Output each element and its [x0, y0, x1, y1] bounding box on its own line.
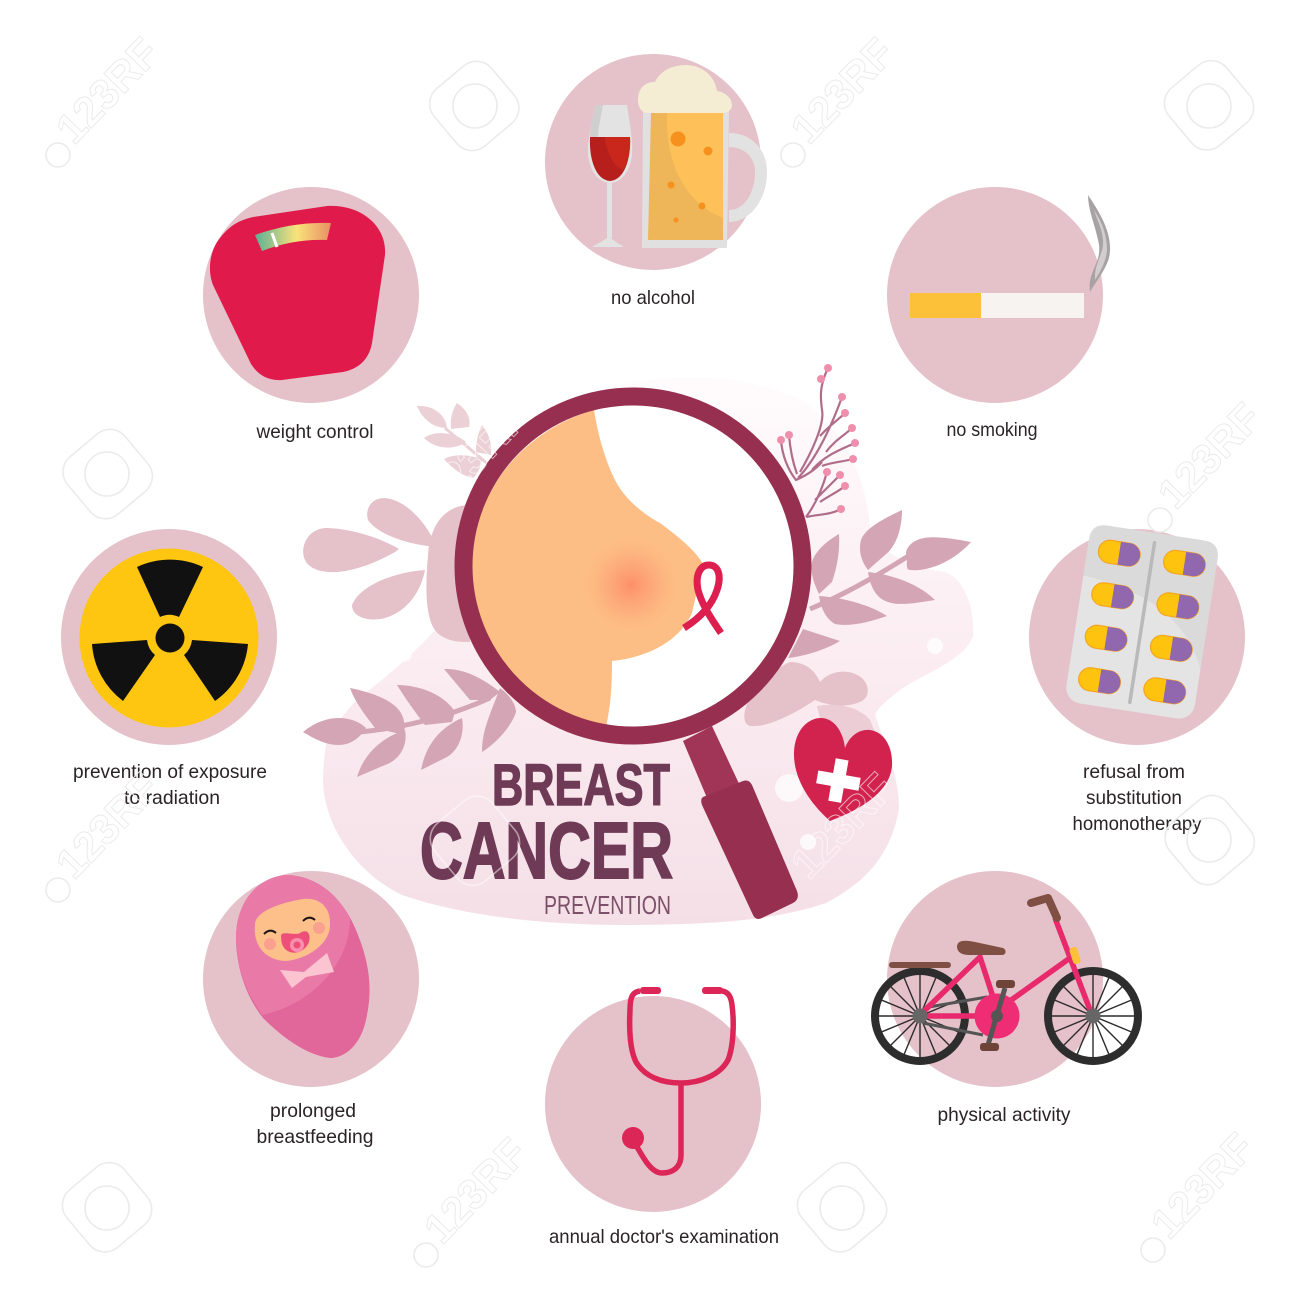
icon: cigarette [910, 195, 1110, 318]
inflammation spot [579, 533, 683, 637]
magnifier handle [683, 726, 742, 805]
panel: no smoking [887, 187, 1110, 441]
panel: prevention of exposure to radiation [61, 529, 277, 809]
icon: pink ribbon [684, 565, 721, 633]
spokes [876, 972, 1137, 1060]
text: 123RF [415, 1129, 536, 1252]
icon: stethoscope [622, 987, 733, 1173]
icon: bicycle [875, 898, 1138, 1061]
title: PREVENTION [544, 890, 671, 920]
icon: wine glass [588, 105, 632, 247]
panel: weight control: weight control [256, 421, 374, 443]
panel: weight control [203, 187, 419, 443]
panel: refusal from substitution homonotherapy [1029, 523, 1245, 835]
leaf branch right [788, 510, 971, 658]
leaf cluster lower right [744, 662, 880, 760]
text: 123RF [782, 764, 903, 887]
panel: prevention of exposure to radiation: to radiation [124, 787, 220, 809]
icon: bathroom scale [210, 206, 385, 380]
panel: annual doctor's examination: annual doctor's examination [549, 1226, 779, 1248]
magnifying glass [463, 396, 803, 919]
text: 123RF [1142, 1124, 1263, 1247]
leaf branch lower left [303, 669, 516, 777]
icon: beer mug [638, 65, 767, 248]
panel: refusal from substitution homonotherapy: homonotherapy [1072, 813, 1202, 835]
icon: blister pack of pills [1064, 523, 1220, 721]
title: BREAST [492, 753, 670, 818]
panel: prevention of exposure to radiation: prevention of exposure [73, 761, 267, 783]
center background blob [323, 377, 973, 925]
panel: refusal from substitution homonotherapy: refusal from [1083, 761, 1185, 783]
panel: prolonged breastfeeding: prolonged [270, 1100, 356, 1122]
panel: refusal from substitution homonotherapy: substitution [1086, 787, 1182, 809]
text: 123RF [47, 29, 168, 152]
title: CANCER [420, 806, 673, 895]
icon: radiation sign [80, 548, 258, 728]
panel: prolonged breastfeeding: breastfeeding [256, 1126, 374, 1148]
panel: physical activity [875, 871, 1138, 1126]
small leaf branch top left [417, 403, 495, 478]
panel: no smoking: no smoking [946, 419, 1038, 441]
lens ring [464, 396, 802, 736]
panel: no alcohol: no alcohol [611, 287, 695, 309]
text: 123RF [1149, 394, 1270, 517]
text: 123RF [782, 29, 903, 152]
title [420, 753, 673, 920]
decorative leaves upper left [303, 498, 470, 642]
icon: swaddled baby [236, 875, 370, 1058]
flowering branch [777, 364, 859, 517]
lens [463, 396, 803, 736]
panel: prolonged breastfeeding [203, 871, 419, 1148]
panel: annual doctor's examination [545, 987, 779, 1248]
text: 123RF [47, 764, 168, 887]
icon: heart with cross [794, 718, 892, 821]
panel: physical activity: physical activity [938, 1104, 1071, 1126]
blob highlights [396, 638, 943, 850]
panel: no alcohol [545, 54, 767, 309]
text: 123RF [415, 394, 536, 517]
breast shape [472, 410, 703, 727]
